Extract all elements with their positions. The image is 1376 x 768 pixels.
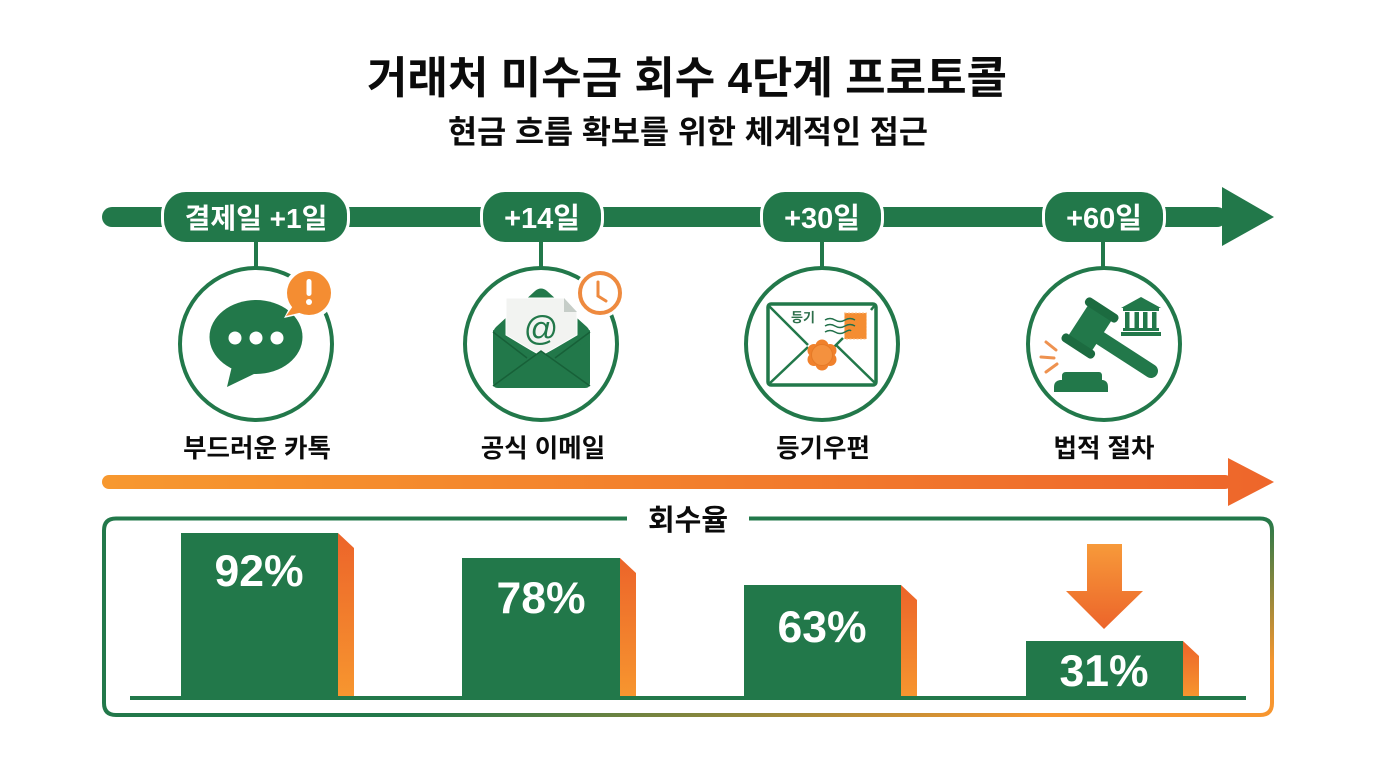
- orange escalation arrow: [102, 458, 1274, 506]
- panel heading: 회수율: [648, 504, 728, 537]
- bar: 78%: [462, 558, 636, 697]
- bar: 92%: 92%: [214, 547, 304, 596]
- panel: recovery rate: [104, 504, 1272, 715]
- timeline pill: +60 days: +60일: [1066, 202, 1142, 235]
- bar: 63%: [744, 585, 917, 697]
- timeline arrow: [102, 187, 1274, 246]
- icon: registered mail: [746, 268, 898, 420]
- step label: registered mail: 등기우편: [776, 435, 870, 463]
- bar: 78%: 78%: [496, 574, 586, 623]
- icon: email with clock: @: [524, 310, 558, 348]
- timeline pill: payment day +1: 결제일 +1일: [185, 203, 327, 234]
- icon: chat bubble with alert: [180, 267, 335, 420]
- step label: formal email: 공식 이메일: [481, 435, 605, 463]
- icon: gavel and courthouse: [1028, 268, 1180, 420]
- timeline pill: +60 days: [1042, 189, 1166, 245]
- timeline pill: +30 days: [760, 189, 884, 245]
- timeline pill: +30 days: +30일: [784, 202, 860, 235]
- step label: soft KakaoTalk: 부드러운 카톡: [183, 435, 331, 463]
- timeline pill: +14 days: [480, 189, 604, 245]
- subtitle: 현금 흐름 확보를 위한 체계적인 접근: [448, 114, 928, 150]
- bar baseline: [130, 696, 1246, 700]
- bar: 31%: [1026, 641, 1199, 697]
- connector lines: [256, 242, 1103, 268]
- arrow: sharp drop: [1066, 544, 1143, 629]
- icon: registered mail: 등기: [791, 310, 815, 325]
- bar: 63%: 63%: [777, 603, 867, 652]
- bar: 31%: 31%: [1059, 647, 1149, 696]
- bar: 92%: [181, 533, 354, 697]
- icon: email with clock: [465, 268, 625, 420]
- timeline pill: payment day +1: [161, 189, 350, 245]
- timeline pill: +14 days: +14일: [504, 202, 580, 235]
- title: 거래처 미수금 회수 4단계 프로토콜: [367, 54, 1007, 103]
- step label: legal action: 법적 절차: [1054, 435, 1154, 463]
